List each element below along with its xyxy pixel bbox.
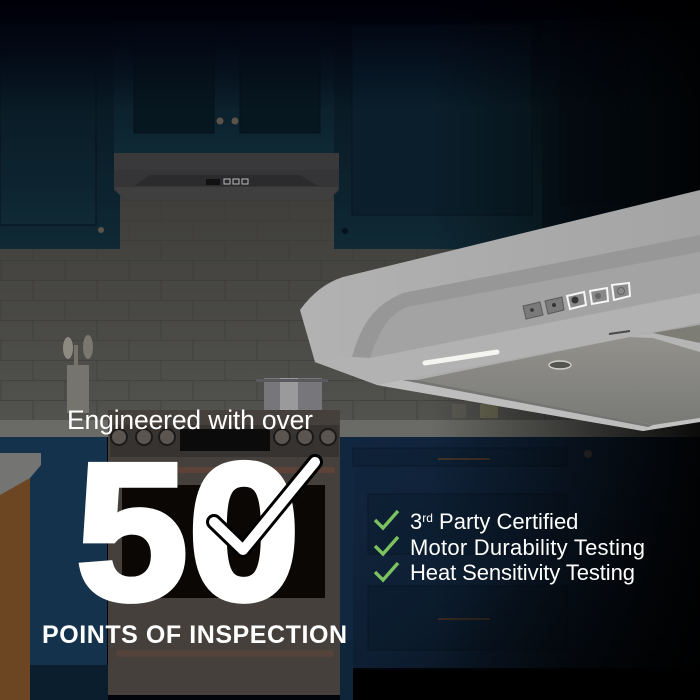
oven window bbox=[122, 485, 325, 598]
oven range bbox=[108, 410, 340, 695]
large stainless range hood bbox=[300, 190, 700, 431]
wood island with marble top bbox=[0, 453, 41, 700]
brand label bbox=[609, 331, 630, 334]
lower cabinets bbox=[0, 437, 700, 700]
control buttons bbox=[523, 283, 630, 319]
big number 50: 50 bbox=[76, 423, 300, 641]
checklist bbox=[375, 509, 645, 585]
wall items under hood bbox=[452, 404, 498, 418]
item: motor durability testing: Motor Durability Testing bbox=[410, 535, 645, 560]
pot on stove bbox=[256, 378, 328, 412]
front control panel bbox=[370, 252, 700, 358]
upper cabinets bbox=[0, 20, 700, 260]
backsplash tile wall bbox=[0, 195, 700, 423]
heading: Engineered with over: Engineered with over bbox=[67, 405, 313, 435]
subheading: points of inspection: POINTS OF INSPECTION bbox=[42, 621, 347, 649]
range display bbox=[180, 429, 270, 451]
hood shell bbox=[300, 190, 700, 431]
item: 3rd party certified: Party Certified bbox=[433, 509, 578, 534]
second filter bbox=[653, 325, 700, 343]
item: heat sensitivity testing: Heat Sensitivity Testing bbox=[410, 560, 635, 585]
countertop bbox=[0, 420, 700, 437]
filter frame bbox=[377, 380, 653, 431]
item: 3rd party certified: rd bbox=[422, 511, 433, 525]
recessed front band bbox=[352, 235, 700, 358]
LED light bbox=[425, 352, 497, 363]
icon: big check mark over zero bbox=[214, 462, 315, 550]
knobs bbox=[111, 429, 336, 445]
main grease filter bbox=[417, 337, 700, 425]
item: 3rd party certified: 3 bbox=[410, 509, 422, 534]
filter divider strip bbox=[630, 333, 700, 352]
lower lip bbox=[315, 293, 700, 385]
center light ring bbox=[549, 361, 571, 369]
small black range hood in scene bbox=[114, 153, 339, 199]
utensil holder bbox=[63, 335, 93, 413]
item: 3rd party certified bbox=[375, 509, 578, 534]
